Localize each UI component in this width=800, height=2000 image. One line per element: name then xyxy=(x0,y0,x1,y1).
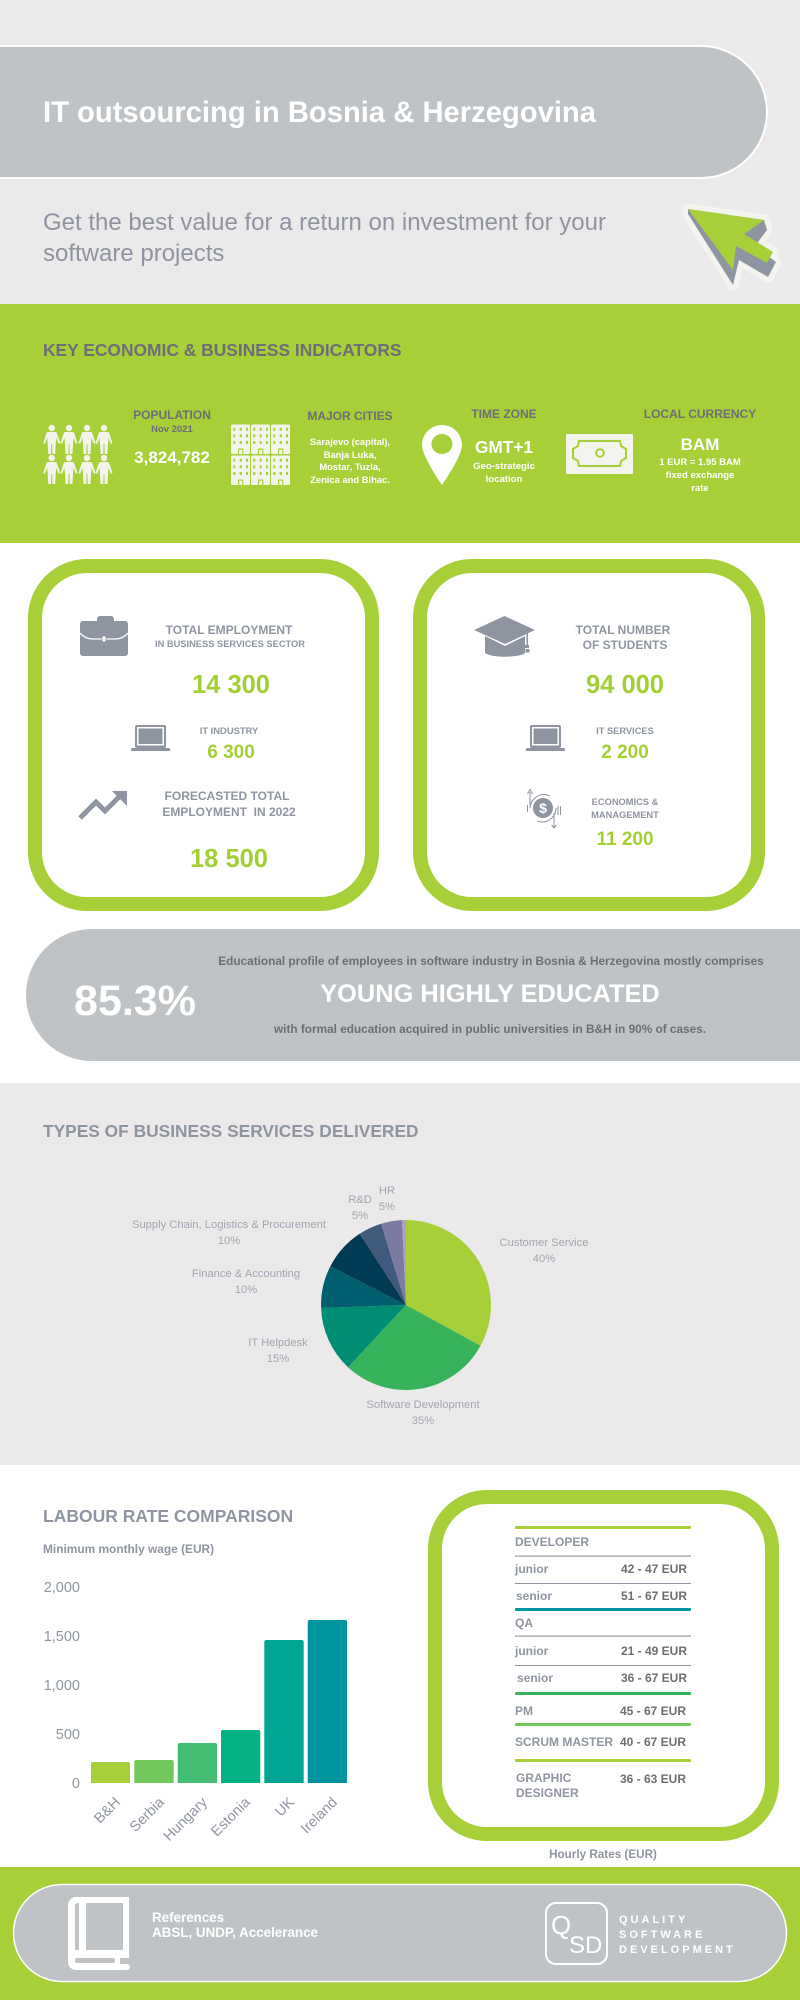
bar chart xyxy=(44,1580,347,1845)
big percentage: 85.3% xyxy=(74,977,196,1025)
total employment: 14 300 xyxy=(192,671,270,699)
logo: QSD: SD xyxy=(569,1932,602,1959)
pie chart xyxy=(321,1220,491,1390)
economics and management xyxy=(591,797,659,850)
rates table: QA xyxy=(515,1616,533,1630)
pie labels: 10% xyxy=(218,1235,240,1247)
it services: IT SERVICES xyxy=(596,726,654,736)
pie labels: 5% xyxy=(379,1201,395,1213)
page background: top xyxy=(0,0,800,304)
bars xyxy=(91,1620,347,1783)
logo: QSD: Q xyxy=(551,1910,571,1940)
rates table: 36 - 67 EUR xyxy=(621,1671,687,1685)
total employment: TOTAL EMPLOYMENT xyxy=(166,623,293,637)
total students: OF STUDENTS xyxy=(583,638,667,652)
population: Nov 2021 xyxy=(151,424,194,435)
panel: key indicators xyxy=(0,304,800,543)
it industry: 6 300 xyxy=(207,742,255,763)
total students: TOTAL NUMBER xyxy=(576,623,671,637)
x axis labels: B&H xyxy=(91,1795,124,1827)
pie labels: HR xyxy=(379,1185,395,1197)
rates table: senior xyxy=(516,1589,552,1603)
title: IT outsourcing in Bosnia & Herzegovina xyxy=(43,97,597,129)
rates table: 36 - 63 EUR xyxy=(620,1772,686,1786)
total students: 94 000 xyxy=(586,671,664,699)
rates table: junior xyxy=(514,1562,549,1576)
economics and management: ECONOMICS & xyxy=(592,797,659,807)
pie labels: Customer Service xyxy=(500,1237,588,1249)
subtitle: Get the best value for a return on investment for your xyxy=(43,209,606,236)
footer pill xyxy=(14,1884,786,1982)
y axis labels xyxy=(44,1580,80,1792)
rates table xyxy=(514,1526,691,1800)
icon: people xyxy=(43,425,113,484)
time zone: Geo-strategic xyxy=(473,461,536,472)
icon: laptop xyxy=(526,725,565,751)
pie labels: 5% xyxy=(352,1210,368,1222)
total students xyxy=(576,623,671,699)
rates table: PM xyxy=(515,1704,533,1718)
local currency: BAM xyxy=(681,435,719,454)
pie labels: 35% xyxy=(412,1415,434,1427)
forecast: 18 500 xyxy=(190,845,268,873)
local currency: fixed exchange xyxy=(666,470,734,481)
local currency: LOCAL CURRENCY xyxy=(644,407,756,421)
rates table: 21 - 49 EUR xyxy=(621,1644,687,1658)
icon: trend arrow xyxy=(80,795,121,818)
local currency xyxy=(644,407,756,494)
pie labels xyxy=(132,1185,588,1427)
pie labels: 40% xyxy=(533,1253,555,1265)
pie labels: R&D xyxy=(348,1194,372,1206)
education text: YOUNG HIGHLY EDUCATED xyxy=(320,980,660,1008)
forecast xyxy=(112,789,296,873)
icon: banknote xyxy=(566,434,633,474)
pie labels: IT Helpdesk xyxy=(248,1337,308,1349)
caption: hourly rates: Hourly Rates (EUR) xyxy=(549,1848,657,1861)
economics and management: MANAGEMENT xyxy=(591,810,659,820)
economics and management: 11 200 xyxy=(596,829,654,850)
panel: employment xyxy=(35,566,372,904)
references xyxy=(152,1910,318,1940)
rates table: 51 - 67 EUR xyxy=(621,1589,687,1603)
x axis labels: Ireland xyxy=(298,1795,341,1837)
panel: students xyxy=(420,566,758,904)
rates table: 45 - 67 EUR xyxy=(620,1704,686,1718)
rates table: GRAPHIC xyxy=(516,1771,572,1785)
icon: dollar exchange: $ xyxy=(539,800,547,816)
y axis labels: 1,500 xyxy=(44,1629,80,1645)
x axis labels xyxy=(91,1794,341,1845)
major cities: MAJOR CITIES xyxy=(307,409,393,423)
company name: DEVELOPMENT xyxy=(619,1944,736,1956)
population: 3,824,782 xyxy=(134,448,210,467)
time zone xyxy=(471,407,537,485)
y axis labels: 2,000 xyxy=(44,1580,80,1596)
panel: hourly rates xyxy=(435,1497,772,1834)
rates table: 40 - 67 EUR xyxy=(620,1735,686,1749)
it industry xyxy=(200,725,259,763)
x axis labels: Estonia xyxy=(208,1794,254,1840)
total employment xyxy=(155,623,305,699)
pie labels: Finance & Accounting xyxy=(192,1268,300,1280)
rates table: DESIGNER xyxy=(516,1786,579,1800)
education text: Educational profile of employees in software industry in Bosnia & Herzegovina mostly comprises xyxy=(218,954,764,968)
y axis labels: 1,000 xyxy=(44,1678,80,1694)
pie labels: 15% xyxy=(267,1353,289,1365)
rates table: DEVELOPER xyxy=(515,1535,589,1549)
it services xyxy=(596,726,654,763)
logo: QSD xyxy=(546,1903,607,1964)
heading: key indicators: KEY ECONOMIC & BUSINESS INDICATORS xyxy=(43,340,402,360)
heading: types of services: TYPES OF BUSINESS SERVICES DELIVERED xyxy=(43,1121,419,1141)
it industry: IT INDUSTRY xyxy=(200,725,259,736)
footer xyxy=(0,1867,800,2000)
heading: labour rate: LABOUR RATE COMPARISON xyxy=(43,1506,293,1526)
icon: location pin xyxy=(422,425,462,485)
rates table: 42 - 47 EUR xyxy=(621,1562,687,1576)
icon: briefcase xyxy=(80,616,128,656)
major cities: Banja Luka, xyxy=(324,449,376,460)
major cities xyxy=(307,409,393,485)
references: References xyxy=(152,1910,224,1925)
forecast: EMPLOYMENT IN 2022 xyxy=(162,805,296,819)
icon: buildings xyxy=(231,424,290,485)
total employment: IN BUSINESS SERVICES SECTOR xyxy=(155,639,305,649)
title banner xyxy=(0,46,767,178)
major cities: Mostar, Tuzla, xyxy=(319,461,381,472)
subtitle xyxy=(43,209,606,267)
icon: laptop xyxy=(131,725,170,751)
forecast: FORECASTED TOTAL xyxy=(165,789,289,803)
icon: graduation cap xyxy=(474,616,535,657)
pie labels: 10% xyxy=(235,1284,257,1296)
local currency: rate xyxy=(691,483,709,494)
pie labels: Supply Chain, Logistics & Procurement xyxy=(132,1219,327,1231)
major cities: Sarajevo (capital), xyxy=(310,436,390,447)
population xyxy=(133,408,211,467)
pie labels: Software Development xyxy=(366,1399,480,1411)
rates table: senior xyxy=(517,1671,553,1685)
time zone: TIME ZONE xyxy=(471,407,537,421)
icon: cursor arrow xyxy=(688,209,776,285)
rates table: junior xyxy=(514,1644,549,1658)
population: POPULATION xyxy=(133,408,211,422)
y axis labels: 500 xyxy=(56,1727,80,1743)
x axis labels: Serbia xyxy=(127,1794,168,1835)
chart subtitle: Minimum monthly wage (EUR) xyxy=(43,1542,214,1556)
callout banner: education xyxy=(26,929,800,1061)
company name: QUALITY xyxy=(619,1914,688,1926)
x axis labels: Hungary xyxy=(161,1794,211,1845)
references: ABSL, UNDP, Accelerance xyxy=(152,1925,318,1940)
education text xyxy=(218,954,764,1036)
local currency: 1 EUR = 1.95 BAM xyxy=(659,457,741,468)
y axis labels: 0 xyxy=(72,1776,80,1792)
subtitle: software projects xyxy=(43,240,224,267)
panel: business services xyxy=(0,1083,800,1465)
time zone: GMT+1 xyxy=(475,437,533,457)
x axis labels: UK xyxy=(272,1794,298,1820)
company name: SOFTWARE xyxy=(619,1929,705,1941)
time zone: location xyxy=(486,474,523,485)
company name xyxy=(619,1914,736,1956)
it services: 2 200 xyxy=(601,742,649,763)
rates table: SCRUM MASTER xyxy=(515,1735,613,1749)
icon: dollar exchange xyxy=(528,790,560,828)
icon: book xyxy=(68,1897,130,1970)
major cities: Zenica and Bihac. xyxy=(310,474,390,485)
education text: with formal education acquired in public universities in B&H in 90% of cases. xyxy=(273,1022,706,1036)
